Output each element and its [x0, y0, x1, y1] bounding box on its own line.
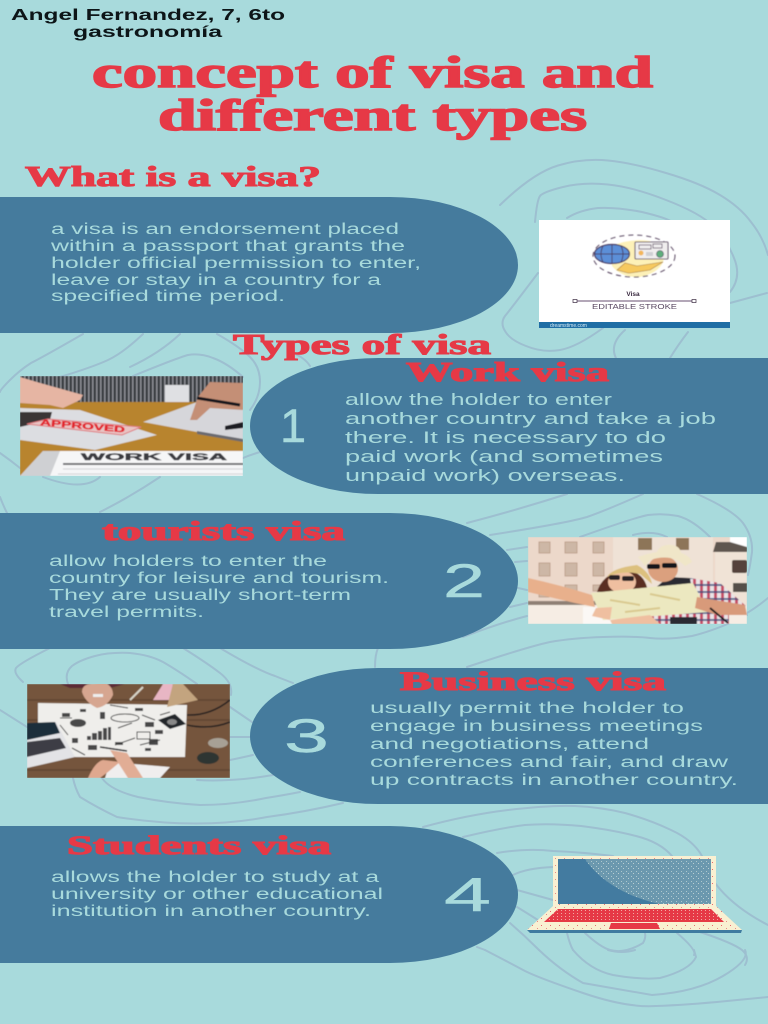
heading: what is a visa: What is a visa? [25, 161, 321, 193]
image: visa concept illustration [539, 220, 730, 329]
number 1: 1 [280, 399, 306, 452]
panel: tourists visa: allow holders to enter the [49, 553, 327, 570]
panel: business visa [250, 667, 768, 804]
image: tourists photo [528, 537, 747, 624]
panel: what is a visa: a visa is an endorsement placed [51, 221, 399, 238]
title: different types [158, 91, 587, 140]
author credit: Angel Fernandez, 7, 6to [11, 7, 285, 24]
number 4: 4 [444, 868, 491, 921]
number 2: 2 [443, 554, 485, 607]
panel: what is a visa: leave or stay in a country for a [51, 272, 382, 289]
panel: business visa: conferences and fair, and draw [370, 754, 729, 771]
heading: students visa: Students visa [67, 831, 331, 860]
panel: work visa: paid work (and sometimes [345, 447, 663, 466]
image: visa concept illustration: dreamstime.com [550, 323, 587, 329]
panel: work visa: unpaid work) overseas. [345, 466, 625, 485]
panel: tourists visa: country for leisure and tourism. [49, 570, 389, 587]
panel: students visa: institution in another country. [51, 903, 371, 920]
author credit: gastronomía [73, 24, 222, 41]
panel: business visa: up contracts in another country. [370, 772, 738, 789]
panel: business visa: and negotiations, attend [370, 736, 649, 753]
heading: work visa: Work visa [406, 357, 610, 387]
image: business planning photo [27, 683, 230, 778]
panel: tourists visa: They are usually short-term [49, 587, 351, 604]
heading: business visa: Business visa [400, 667, 666, 696]
panel: students visa: university or other educational [51, 886, 383, 903]
panel: tourists visa [0, 513, 518, 649]
panel: what is a visa: holder official permission to enter, [51, 255, 421, 272]
icon: laptop [527, 856, 742, 933]
panel: what is a visa: specified time period. [51, 288, 285, 305]
image: work visa photo: APPROVED [40, 417, 125, 434]
panel: what is a visa [0, 197, 518, 333]
title: concept of visa and [92, 48, 653, 97]
image: visa concept illustration: Visa [626, 291, 640, 298]
panel: tourists visa: travel permits. [49, 604, 204, 621]
image: work visa photo: WORK VISA [81, 452, 228, 462]
image: work visa photo [20, 376, 243, 476]
panel: students visa: allows the holder to study at a [51, 869, 380, 886]
panel: what is a visa: within a passport that grants the [49, 238, 405, 255]
panel: work visa [250, 357, 768, 494]
heading: types of visa: Types of visa [233, 329, 492, 361]
panel: business visa: usually permit the holder to [370, 700, 684, 717]
panel: students visa [0, 826, 518, 963]
author credit [11, 7, 285, 41]
heading: tourists visa: tourists visa [102, 516, 346, 546]
panel: work visa: another country and take a job [345, 409, 716, 428]
panel: work visa: there. It is necessary to do [345, 428, 666, 447]
panel: work visa: allow the holder to enter [345, 390, 612, 409]
number 3: 3 [284, 709, 329, 762]
panel: business visa: engage in business meetings [370, 718, 703, 735]
image: visa concept illustration: EDITABLE STROKE [592, 302, 677, 311]
title [92, 48, 653, 140]
